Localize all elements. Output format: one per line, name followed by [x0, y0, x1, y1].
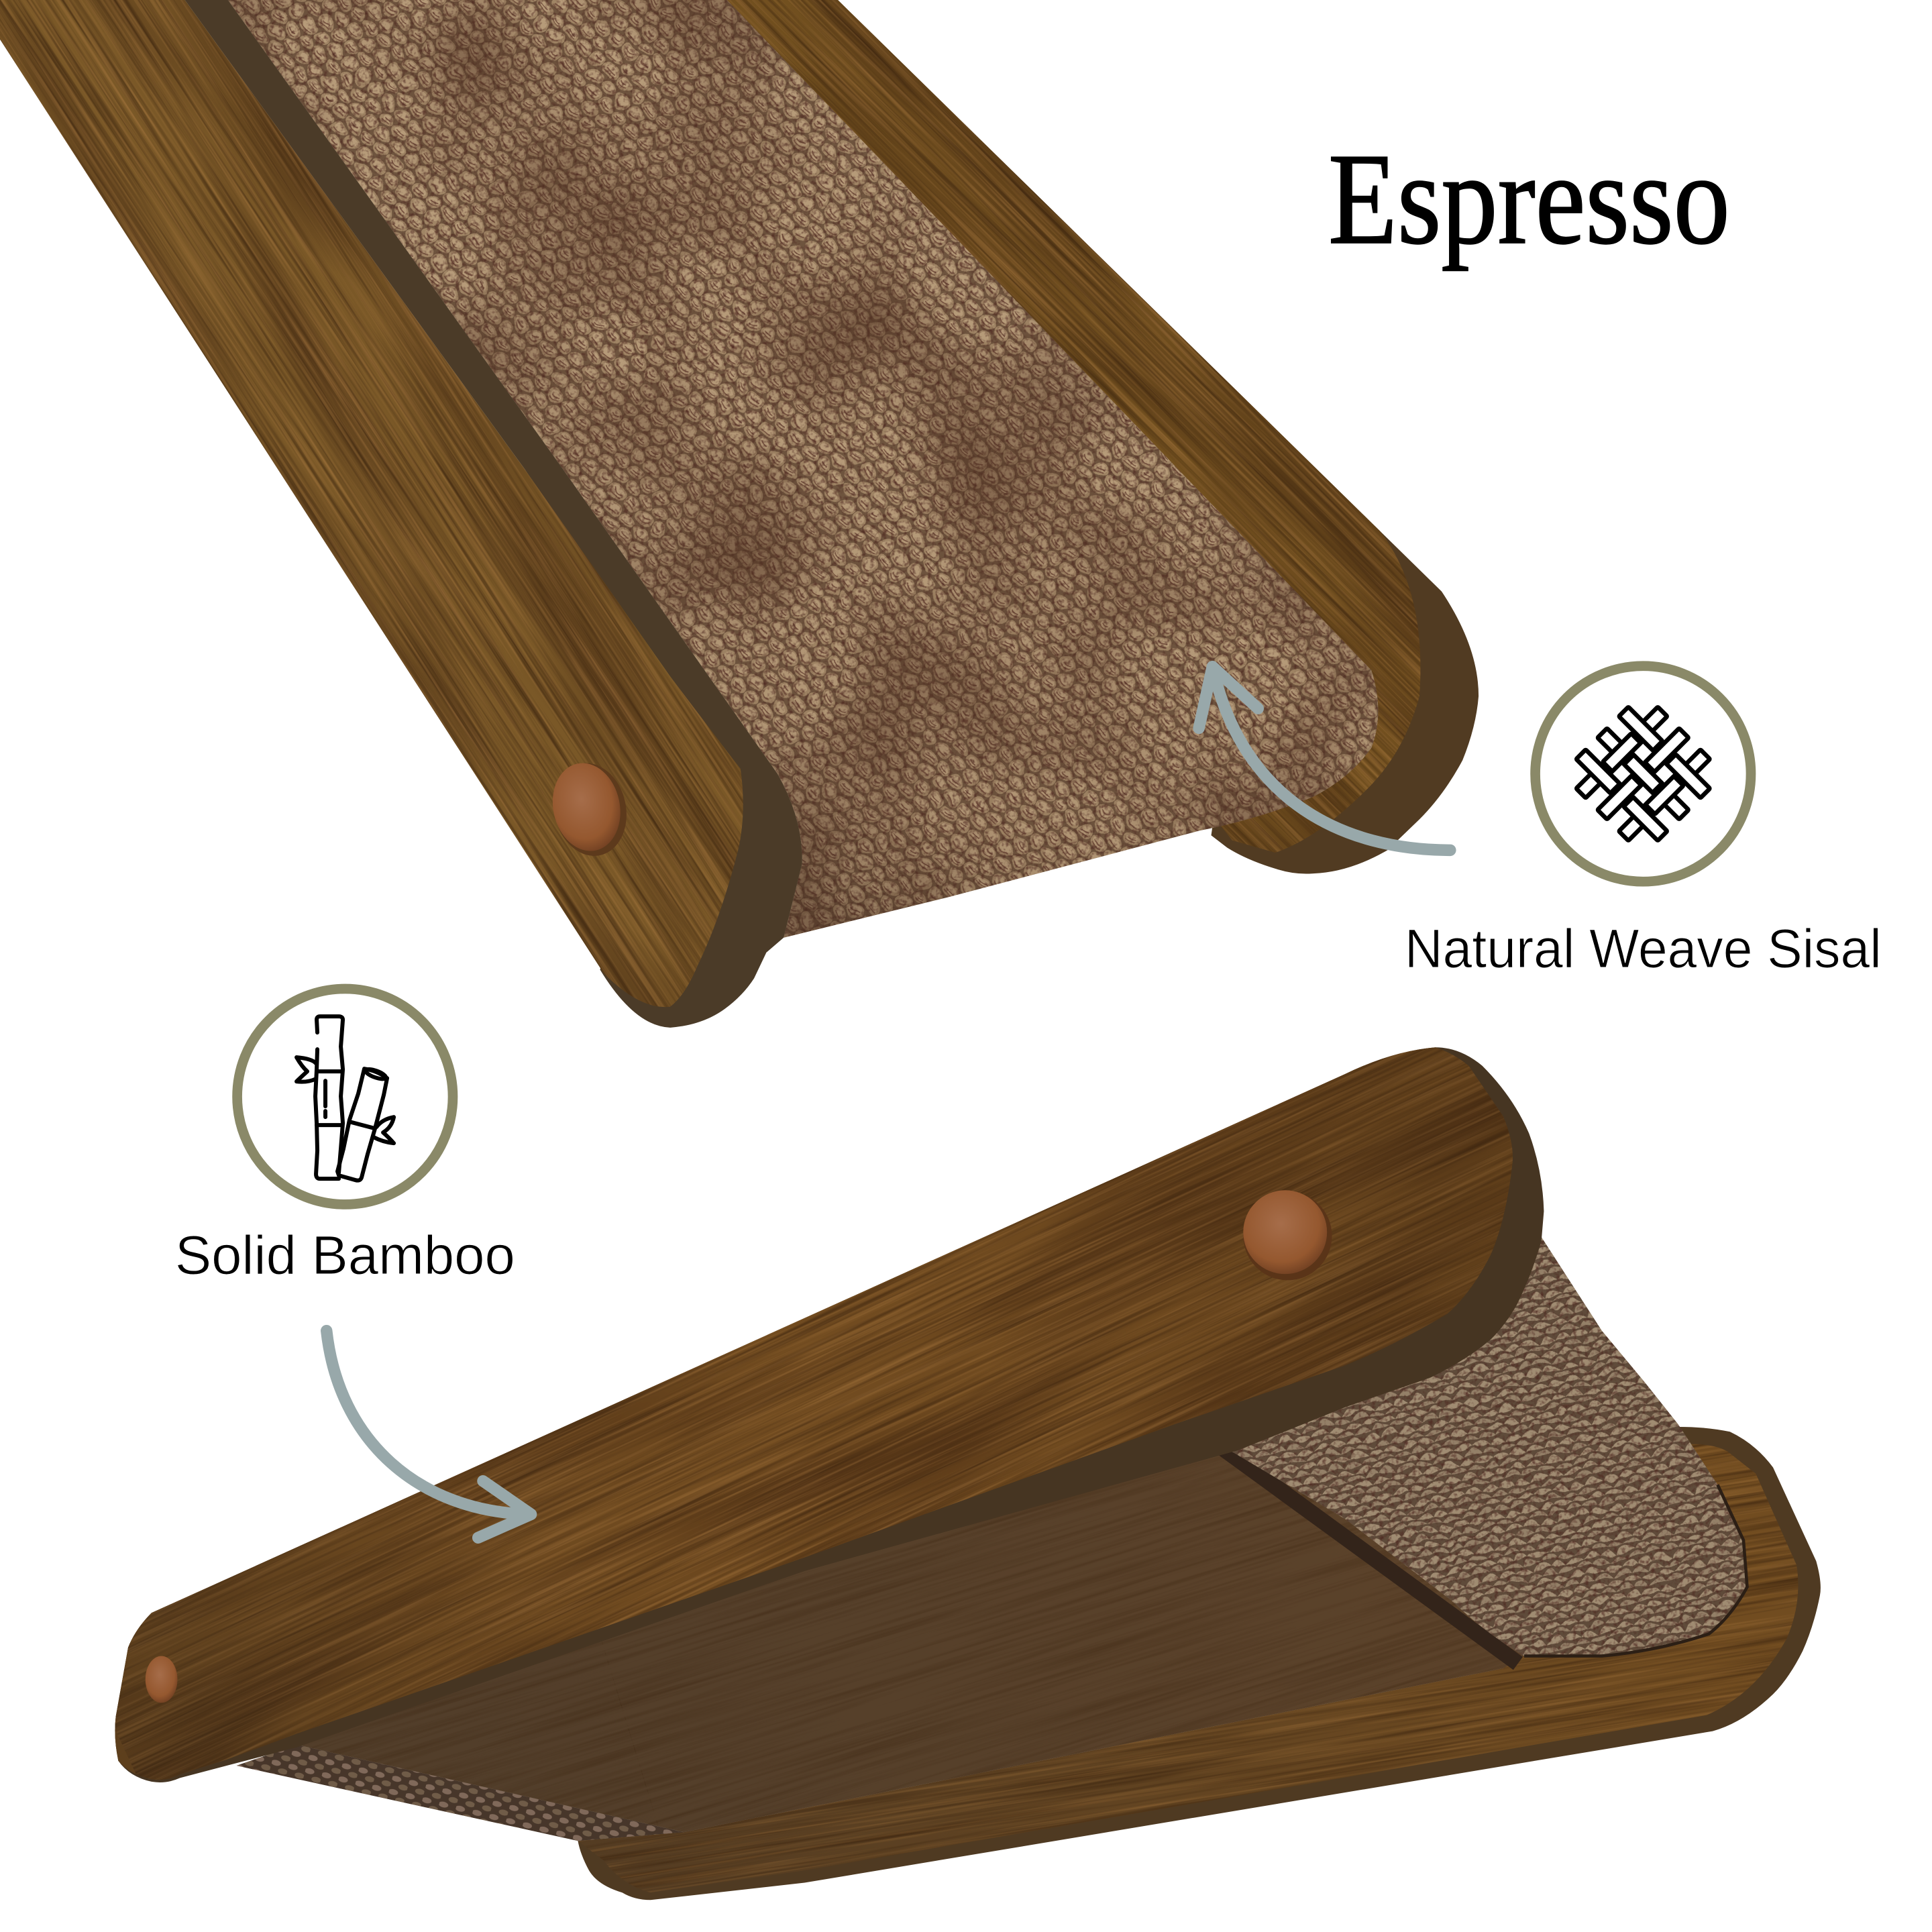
- rivet large: [1243, 1190, 1332, 1280]
- sisal weave surface: [228, 0, 1378, 938]
- dark board edge: [185, 0, 802, 1028]
- rivet small: [146, 1656, 177, 1703]
- dark underside panel: [301, 1452, 1524, 1833]
- sisal rolled end: [1220, 1232, 1762, 1676]
- title: Espresso: [1328, 127, 1730, 272]
- sisal underside strip: [236, 1746, 684, 1841]
- icon: natural weave sisal badge: [1536, 666, 1751, 881]
- icon: solid bamboo badge: [237, 989, 453, 1204]
- front board dark rim: [115, 1047, 1544, 1782]
- right bamboo rail: [727, 0, 1479, 873]
- left bamboo board face: [0, 0, 743, 1008]
- icon: bamboo: [297, 1016, 394, 1181]
- icon: basket weave: [1562, 692, 1725, 855]
- product photo: upper scratcher, top view: [0, 0, 1479, 1028]
- front bamboo board face: [73, 996, 1588, 1930]
- arrow: to bamboo board: [327, 1331, 531, 1538]
- badge ring: [1536, 666, 1751, 881]
- product photo: lower scratcher, underside view: [73, 996, 1847, 1932]
- label: natural weave sisal: Natural Weave Sisal: [1405, 918, 1882, 979]
- arrow: to sisal: [1199, 667, 1450, 850]
- badge ring: [237, 989, 453, 1204]
- label: solid bamboo: Solid Bamboo: [175, 1225, 515, 1286]
- lower rail: [578, 1427, 1821, 1900]
- rivet: [545, 756, 635, 863]
